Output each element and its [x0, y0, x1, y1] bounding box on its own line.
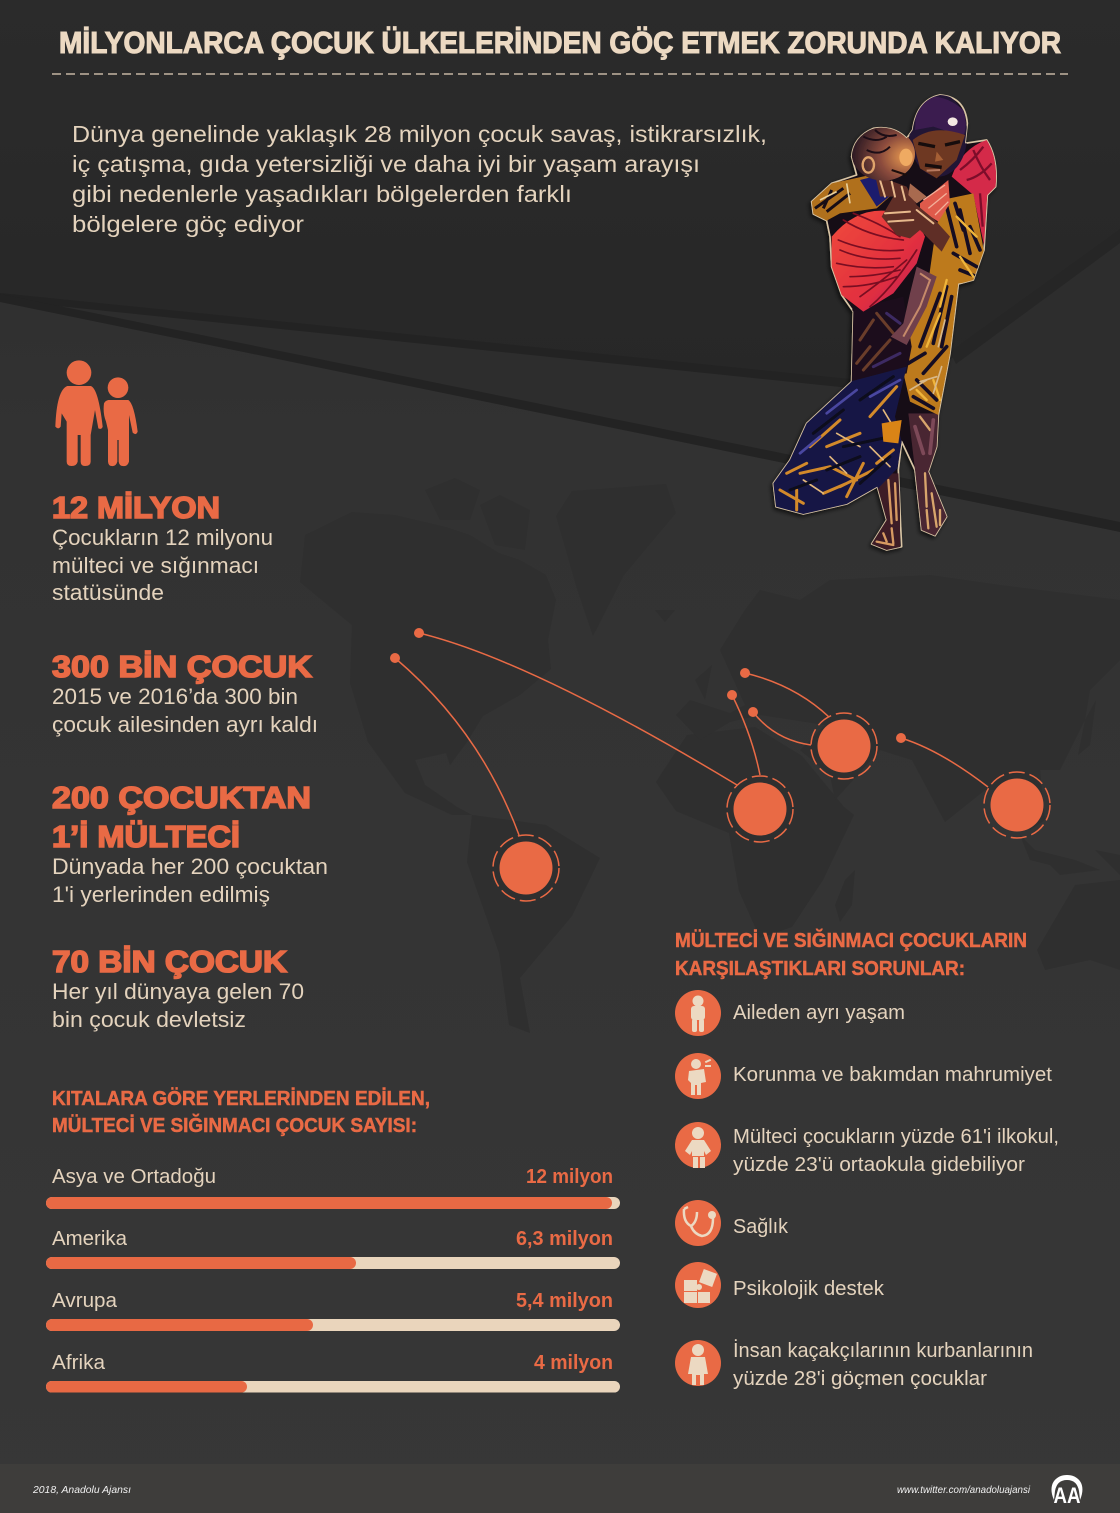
stat: 300 bin çocuk: [52, 649, 318, 737]
baby sleeve: [812, 175, 893, 221]
map markers and connectors: [390, 628, 1050, 901]
orange patch: [882, 420, 902, 443]
stat: 200 çocuktan 1'i mülteci: [52, 780, 328, 907]
red cloth: [952, 140, 996, 245]
stat: 12 milyon: 12 MİLYON: [52, 490, 220, 525]
footer: [0, 1464, 1120, 1513]
bar: Afrika: Afrika: [52, 1352, 106, 1374]
intro text: bölgelere göç ediyor: [72, 211, 304, 237]
item: school attendance: Mülteci çocukların yüzde 61'i ilkokul,: [733, 1126, 1059, 1148]
stat: 70 bin çocuk: 70 BİN ÇOCUK: [52, 944, 288, 979]
item: separated from family: [675, 990, 905, 1036]
stat: 70 bin çocuk: [52, 944, 304, 1032]
stat: 12 milyon: statüsünde: [52, 580, 164, 605]
icon: adult and child: [55, 360, 138, 466]
panel: problems: MÜLTECİ VE SIĞINMACI ÇOCUKLARIN: [675, 928, 1027, 952]
dress: [900, 193, 984, 415]
bar: Amerika: [46, 1228, 620, 1269]
bar chart: children by continent: MÜLTECİ VE SIĞINMACI ÇOCUK SAYISI:: [52, 1113, 417, 1137]
footer: 2018, Anadolu Ajansı: [32, 1484, 131, 1496]
intro text: iç çatışma, gıda yetersizliği ve daha iyi bir yaşam arayışı: [72, 151, 700, 177]
item: separated from family: Aileden ayrı yaşam: [733, 1002, 905, 1024]
intro text: Dünya genelinde yaklaşık 28 milyon çocuk savaş, istikrarsızlık,: [72, 121, 767, 147]
item: lack of protection and care: [675, 1053, 1052, 1099]
item: school attendance: yüzde 23'ü ortaokula gidebiliyor: [733, 1154, 1025, 1176]
bar: Amerika: 6,3 milyon: [516, 1228, 613, 1250]
stat: 300 bin çocuk: çocuk ailesinden ayrı kaldı: [52, 712, 318, 737]
stat: 12 milyon: mülteci ve sığınmacı: [52, 553, 259, 578]
bar: Asya ve Ortadoğu: Asya ve Ortadoğu: [52, 1166, 216, 1188]
baby head: [852, 127, 915, 181]
item: trafficking victims: [675, 1339, 1033, 1390]
item: lack of protection and care: Korunma ve bakımdan mahrumiyet: [733, 1064, 1052, 1086]
stat: 200 çocuktan 1'i mülteci: Dünyada her 200 çocuktan: [52, 854, 328, 879]
hands: [875, 175, 950, 252]
baby leg: [891, 267, 937, 345]
silhouette: [773, 95, 996, 550]
item: psychological support: Psikolojik destek: [733, 1278, 885, 1300]
bar chart: children by continent: [46, 1087, 620, 1392]
illustration: child carrying a sibling: [770, 93, 996, 553]
stat: 70 bin çocuk: bin çocuk devletsiz: [52, 1007, 246, 1032]
red wrap: [832, 211, 925, 312]
bar: Afrika: [46, 1352, 620, 1392]
panel: problems: KARŞILAŞTIKLARI SORUNLAR:: [675, 958, 965, 980]
older child head: [909, 93, 967, 177]
world map: [300, 478, 1120, 1033]
bar: Avrupa: Avrupa: [52, 1290, 118, 1312]
bar: Asya ve Ortadoğu: 12 milyon: [526, 1166, 613, 1188]
intro text: [72, 121, 767, 237]
icon: AA logo: [1052, 1475, 1082, 1508]
item: trafficking victims: İnsan kaçakçılarının kurbanlarının: [733, 1339, 1033, 1362]
stat: 200 çocuktan 1'i mülteci: 200 ÇOCUKTAN: [52, 780, 311, 815]
panel: problems: [675, 928, 1059, 1390]
legs: [870, 473, 900, 553]
bar: Avrupa: 5,4 milyon: [516, 1290, 613, 1312]
stat: 70 bin çocuk: Her yıl dünyaya gelen 70: [52, 979, 304, 1004]
skirt: [770, 367, 907, 517]
stat: 12 milyon: [52, 360, 273, 605]
bar: Avrupa: [46, 1290, 620, 1331]
item: health: [675, 1200, 789, 1246]
icon: AA logo: AA: [1054, 1483, 1081, 1508]
item: trafficking victims: yüzde 28'i göçmen çocuklar: [733, 1368, 987, 1390]
intro text: gibi nedenlerle yaşadıkları bölgelerden farklı: [72, 181, 572, 207]
chest wrap: [920, 180, 950, 222]
stat: 300 bin çocuk: 300 BİN ÇOCUK: [52, 649, 313, 684]
stat: 200 çocuktan 1'i mülteci: 1’İ MÜLTECİ: [52, 819, 240, 854]
stat: 300 bin çocuk: 2015 ve 2016’da 300 bin: [52, 684, 298, 709]
item: health: Sağlık: [733, 1216, 789, 1238]
bar: Afrika: 4 milyon: [534, 1352, 613, 1374]
item: school attendance: [675, 1122, 1059, 1176]
item: psychological support: [675, 1262, 885, 1308]
bar: Asya ve Ortadoğu: [46, 1166, 620, 1209]
bar: Amerika: Amerika: [52, 1228, 128, 1250]
stat: 12 milyon: Çocukların 12 milyonu: [52, 525, 273, 550]
stat: 200 çocuktan 1'i mülteci: 1'i yerlerinden edilmiş: [52, 882, 270, 907]
bar chart: children by continent: KITALARA GÖRE YERLERİNDEN EDİLEN,: [52, 1087, 430, 1110]
footer: www.twitter.com/anadoluajansi: [897, 1484, 1031, 1496]
